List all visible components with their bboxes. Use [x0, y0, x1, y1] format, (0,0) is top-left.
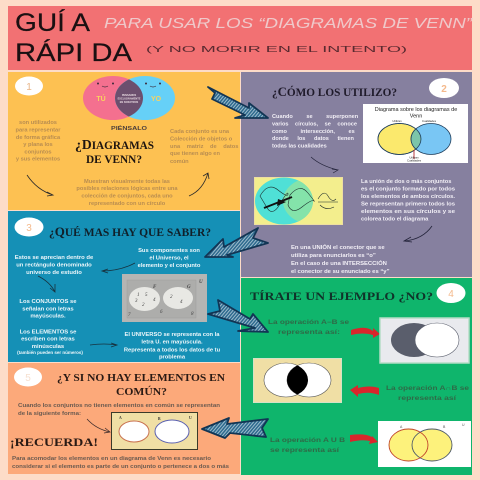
subtitle: PARA USAR LOS “DIAGRAMAS DE VENN”	[104, 16, 474, 32]
text: elementos: escriben con letras	[21, 336, 76, 342]
chart: disjoint sets: A	[119, 416, 122, 420]
text: componentes: el Universo, el	[149, 256, 189, 262]
text: universo: Representa a todos los datos de tu	[124, 348, 221, 354]
text: union: Se representan primero todos los	[361, 202, 455, 208]
heading: diagramas de venn: ¿DIAGRAMAS	[75, 138, 154, 153]
arrow: curved down	[27, 175, 53, 196]
text: rectangulo	[15, 255, 94, 276]
heading: recuerda: ¡RECUERDA!	[10, 435, 98, 449]
text: intersection: como intersección, es	[272, 129, 355, 135]
chart: union: A	[400, 425, 403, 429]
chart: universe diagram: 1	[137, 293, 140, 298]
chart: venn card	[363, 104, 468, 163]
chart: disjoint sets: B	[158, 417, 161, 421]
arrow: to connector text	[404, 226, 432, 242]
icon: venn tu yo: PENSAMOS	[122, 94, 136, 97]
text: A-B: La operación A−B se	[268, 320, 350, 326]
panel 1: diagramas de venn	[8, 72, 240, 210]
text: para acomodar	[12, 456, 229, 470]
chart: disjoint sets	[112, 412, 198, 450]
text: AUB	[270, 438, 346, 454]
title: GUÍ A	[15, 8, 90, 37]
text: union: es el conjunto formado por todos	[361, 186, 455, 192]
text: right: Cada conjunto es una	[170, 129, 230, 135]
text: left: y plana los	[23, 142, 53, 148]
number badge 3: 3	[26, 223, 32, 234]
arrow: curved up	[189, 173, 209, 196]
number badge 2: 2	[441, 84, 447, 95]
chart: universe diagram	[122, 274, 207, 322]
text: rectangulo: universo de estudio	[26, 270, 82, 276]
text: conjuntos: señalan con letras	[22, 306, 74, 312]
chart: A minus B	[380, 318, 469, 363]
number badge 1: 1	[26, 82, 32, 93]
text: cuando	[18, 403, 220, 417]
chart: intersection	[254, 358, 342, 402]
title: RÁPI DA	[15, 38, 132, 67]
text: conjuntos: mayúsculas.	[30, 314, 66, 320]
arrow: to venn picture	[311, 157, 338, 173]
text: left: son utilizados	[19, 120, 57, 126]
chart: venn card: Venn	[410, 114, 422, 120]
text: A-B	[268, 320, 350, 336]
chart: union: U	[462, 423, 465, 427]
heading: y si no hay elementos	[57, 372, 225, 398]
number badge 3	[14, 218, 44, 236]
text: A∩B	[386, 386, 470, 402]
heading: y si no hay elementos: COMÚN?	[116, 386, 167, 398]
tagline: (Y NO MORIR EN EL INTENTO)	[146, 44, 407, 54]
text: cuando: Cuando los conjuntos no tienen elementos en común se representan	[18, 403, 220, 409]
text: elementos: (también pueden ser números)	[17, 350, 83, 355]
arrow: blue panel 3 to 4	[208, 300, 268, 332]
chart: venn card: Utilizan	[409, 156, 419, 160]
text: left: para representar	[16, 128, 61, 134]
chart: venn card: Cualidades	[407, 158, 422, 162]
chart: union	[378, 421, 471, 467]
text: connectors: En una UNIÓN el conector que se	[291, 243, 385, 251]
chart: union: B	[443, 425, 446, 429]
heading: que mas hay que saber: ¿QUÉ MAS HAY QUE SABER?	[49, 224, 211, 239]
text: intersection: varios círculos, se conoce	[272, 122, 357, 128]
text: intersection: todas las cualidades	[272, 144, 327, 150]
chart: universe diagram: F	[153, 285, 157, 290]
icon: venn tu yo: YO	[151, 96, 162, 103]
chart: venn card: Cualidades	[422, 119, 437, 123]
arrow: blue panel 2 to 3	[205, 228, 268, 257]
text: elementos	[17, 330, 83, 355]
text: A-B: representa así:	[278, 330, 340, 336]
text: bottom	[76, 179, 178, 207]
chart: disjoint sets: U	[189, 416, 192, 420]
chart: universe diagram: 3	[135, 299, 138, 304]
arrow: red to A-B	[351, 328, 380, 338]
text: right: Colección de objetos o	[170, 136, 233, 142]
chart: universe diagram: 4	[180, 300, 183, 305]
text: elementos: minúsculas	[32, 344, 65, 350]
text: union: los elementos de ambos círculos.	[361, 194, 455, 200]
text: union: elementos en sus círculos y se	[361, 209, 455, 215]
heading: diagramas de venn: DE VENN?	[86, 154, 142, 166]
text: connectors: el conector de su enunciado es “y”	[291, 269, 390, 275]
text: rectangulo: Estos se aprecian dentro de	[15, 255, 94, 261]
text: right: que tienen algo en	[170, 151, 220, 157]
text: A∩B: representa así	[398, 396, 456, 402]
number badge 5	[14, 368, 42, 386]
heading: tirate un ejemplo: TÍRATE UN EJEMPLO ¿NO?	[250, 289, 433, 303]
chart: universe diagram: 8	[191, 312, 194, 317]
text: union	[361, 179, 455, 222]
arrow: red to intersection	[350, 385, 379, 397]
arrow: to disjoint diagram	[87, 419, 110, 433]
number badge 5: 5	[25, 373, 31, 384]
text: left	[16, 120, 61, 162]
text: union: colorea todo el diagrama	[361, 216, 429, 222]
text: bottom: representado con un círculo	[89, 201, 166, 207]
text: right: común	[170, 159, 189, 165]
icon: venn tu yo	[83, 76, 175, 120]
text: intersection	[272, 114, 359, 150]
text: union: La unión de dos o más conjuntos	[361, 179, 451, 185]
panel: header	[8, 6, 474, 70]
text: universo	[124, 332, 221, 360]
chart: universe diagram: G	[187, 285, 191, 290]
heading: como los utilizo: ¿CÓMO LOS UTILIZO?	[272, 84, 397, 99]
heading: diagramas de venn	[75, 138, 154, 166]
text: AUB: se representa así	[270, 448, 339, 454]
title	[15, 8, 132, 67]
text: right	[170, 129, 238, 165]
text: left: y sus elementos	[16, 156, 60, 162]
panel 3: que mas hay que saber	[8, 211, 240, 362]
number badge 2	[429, 78, 459, 98]
icon: venn tu yo: EXCLUSIVAMENTE	[118, 98, 141, 100]
text: para acomodar: considerar si el elemento es parte de un conjunto o pertenece a dos o más	[12, 464, 229, 470]
chart: venn card: Diagrama sobre los diagramas de	[375, 107, 457, 113]
arrow: red to AUB	[350, 434, 378, 444]
text: intersection: Cuando se superponen	[272, 114, 359, 120]
panel 2: como los utilizo	[241, 72, 472, 277]
chart: universe diagram: 7	[128, 313, 131, 318]
text: connectors	[291, 243, 390, 275]
text: componentes	[138, 248, 201, 269]
text: universo: letra U. en mayúscula.	[141, 340, 203, 346]
image: drawn venn	[254, 177, 343, 225]
text: rectangulo: un rectángulo denominado	[16, 262, 92, 268]
text: componentes: elemento y el conjunto	[138, 263, 201, 269]
icon: venn tu yo: EN NOSOTROS	[120, 101, 139, 104]
arrow: blue panel 4 to 5	[202, 418, 268, 438]
text: A∩B: La operación A∩B se	[386, 386, 470, 392]
text: bottom: posibles relaciones lógicas entre una	[76, 186, 178, 192]
number badge 4: 4	[448, 289, 454, 300]
chart: universe diagram: U	[199, 280, 203, 285]
text: universo: problema	[159, 354, 186, 360]
text: left: conjuntos	[24, 150, 52, 156]
panel 4: tirate un ejemplo	[241, 278, 472, 475]
number badge 4	[436, 283, 466, 303]
text: universo: El UNIVERSO se representa con la	[124, 332, 220, 338]
text: cuando: de la siguiente forma:	[18, 411, 81, 417]
text: intersection: donde los datos tienen	[272, 136, 354, 142]
text: elementos: Los ELEMENTOS se	[20, 330, 77, 336]
text: conjuntos: Los CONJUNTOS se	[19, 299, 77, 305]
chart: universe diagram: 4	[153, 298, 156, 303]
chart: venn card: Utilizan	[392, 119, 402, 123]
text: para acomodar: Para acomodar los elementos en un diagrama de Venn es necesario	[12, 456, 211, 462]
heading: y si no hay elementos: ¿Y SI NO HAY ELEMENTOS EN	[57, 372, 225, 384]
text: right: una matriz de datos	[170, 144, 238, 150]
text: connectors: utiliza para enunciarlos es “o”	[291, 253, 376, 259]
text: bottom: colección de conjuntos, cada uno	[81, 194, 173, 200]
caption: piensalo: PIÉNSALO	[111, 124, 148, 132]
text: componentes: Sus componentes son	[138, 248, 200, 254]
icon: venn tu yo: TÚ	[96, 94, 106, 103]
chart: universe diagram: 5	[145, 293, 148, 298]
arrow: to universo	[90, 343, 117, 347]
text: left: de forma gráfica	[16, 135, 61, 141]
text: bottom: Muestran visualmente todas las	[84, 179, 170, 185]
chart: universe diagram: 2	[170, 295, 173, 300]
text: AUB: La operación A U B	[270, 438, 346, 444]
arrow: blue panel 1 to 2	[208, 87, 268, 118]
arrow: to conjuntos	[38, 276, 55, 292]
chart: universe diagram: 6	[160, 310, 163, 315]
text: connectors: En el caso de una INTERSECCIÓN	[291, 259, 387, 267]
number badge 1	[15, 76, 43, 96]
panel 5: sin elementos en comun	[8, 363, 240, 474]
chart: universe diagram: 2	[142, 303, 145, 308]
text: conjuntos	[19, 299, 77, 320]
arrow: to rectangulo text	[102, 263, 135, 273]
